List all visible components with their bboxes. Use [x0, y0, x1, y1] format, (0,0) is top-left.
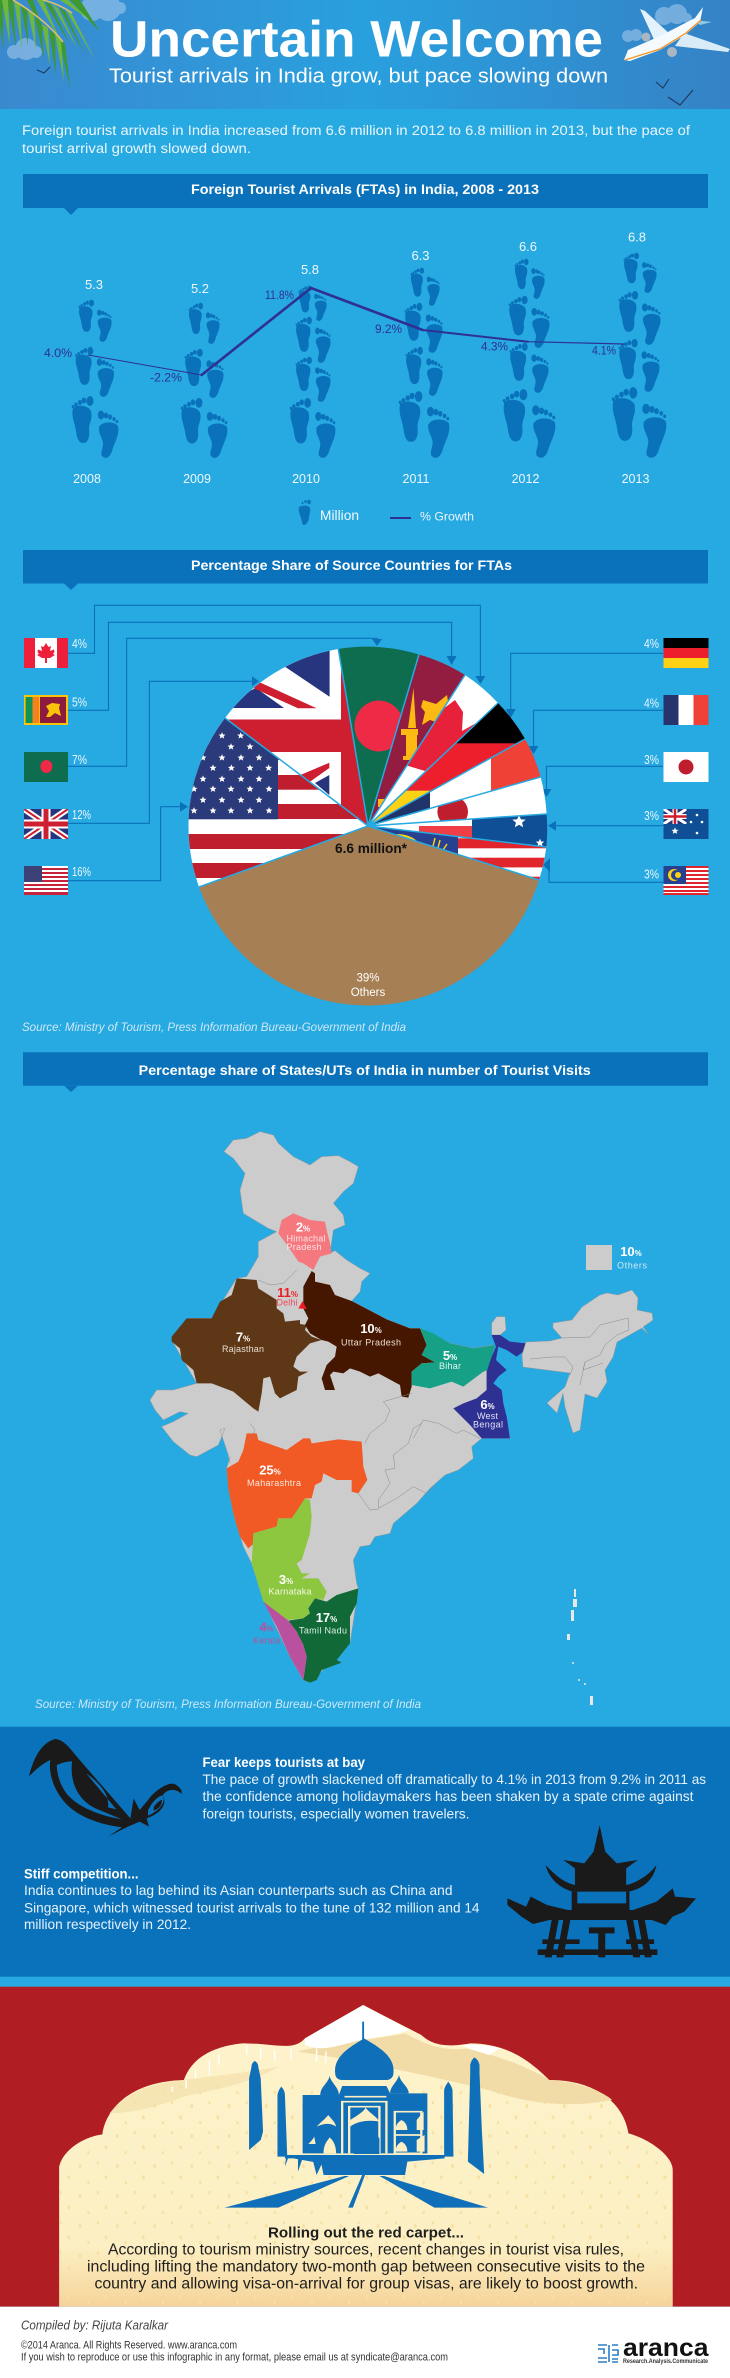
map label: Tamil Nadu: 17%: [316, 1610, 337, 1625]
right percent labels: [644, 637, 659, 882]
aranca logo: aranca: [623, 2334, 710, 2362]
flag: Australia: [664, 809, 708, 839]
map legend: others: [586, 1244, 648, 1270]
map label: Kerala: Kerala: [253, 1636, 280, 1646]
others label: 39%: [356, 972, 380, 984]
aranca logo: Research.Analysis.Communicate: [623, 2358, 708, 2365]
platform: [285, 2155, 445, 2175]
year labels: [73, 472, 649, 486]
flag: Bangladesh: [24, 752, 68, 782]
slice: Sri Lanka: [370, 654, 465, 821]
map label: Kerala: [253, 1620, 280, 1646]
year labels: 2012: [512, 472, 539, 486]
finial: [362, 2022, 364, 2040]
section heading: source countries: Percentage Share of Source Countries for FTAs: [191, 558, 512, 573]
map label: Karnataka: 3%: [279, 1572, 293, 1587]
legend: Million: [320, 508, 359, 523]
pie centre label: 6.6 million*: [335, 841, 408, 856]
slice: Canada: [372, 675, 498, 822]
map legend: others: 10%: [620, 1244, 642, 1259]
text: stiff competition: Stiff competition...: [24, 1866, 138, 1882]
subtitle: Tourist arrivals in India grow, but pace slowing down: [109, 66, 608, 88]
state: Maharashtra: [227, 1433, 367, 1548]
growth labels: 4.3%: [481, 340, 508, 354]
footer: [0, 2307, 730, 2378]
legend: [299, 500, 474, 525]
arch shape: [59, 2005, 673, 2307]
copyright: If you wish to reproduce or use this infographic in any format, please email us at syndicate@aranca.com: [21, 2352, 448, 2364]
slice: Germany: [372, 703, 525, 822]
footprints 2011: [399, 268, 449, 458]
million values: [85, 230, 646, 296]
intro text: Foreign tourist arrivals in India increased from 6.6 million in 2012 to 6.8 million in 2013, but the pace of: [22, 123, 690, 138]
slice: Malaysia: [376, 828, 546, 880]
icon: pagoda: [507, 1825, 696, 1957]
growth labels: 9.2%: [375, 322, 402, 336]
million values: 6.6: [519, 239, 537, 254]
state: Uttar Pradesh: [303, 1271, 435, 1398]
intro text: [22, 123, 690, 156]
garden paths: [224, 2175, 488, 2208]
text: rolling out the red carpet: Rolling out the red carpet...: [268, 2224, 464, 2242]
others label: Others: [351, 987, 386, 999]
growth labels: -2.2%: [150, 370, 182, 384]
year labels: 2013: [622, 472, 649, 486]
clouds: [7, 0, 692, 60]
right percent labels: 4%: [644, 696, 659, 710]
text: rolling out the red carpet: [87, 2224, 645, 2292]
map label: Karnataka: [268, 1572, 312, 1596]
dotted texture: [59, 2080, 673, 2307]
footprints 2008: [72, 300, 118, 458]
panel: fear and competition: [0, 1727, 730, 1977]
copyright: ©2014 Aranca. All Rights Reserved. www.aranca.com: [21, 2340, 237, 2352]
text: stiff competition: India continues to lag behind its Asian counterparts such as China and: [24, 1882, 452, 1898]
section heading: foreign tourist arrivals: [23, 174, 708, 215]
text: fear keeps tourists at bay: the confidence among holidaymakers has been shaken by a spate crime against: [202, 1788, 694, 1804]
map label: West Bengal: 6%: [480, 1397, 495, 1412]
mainland base: [150, 1132, 510, 1683]
map label: Tamil Nadu: Tamil Nadu: [299, 1626, 347, 1636]
left percent labels: 5%: [72, 696, 87, 710]
map label: Rajasthan: Rajasthan: [222, 1344, 264, 1354]
copyright: [21, 2340, 448, 2364]
Sikkim: [492, 1317, 506, 1335]
title: Uncertain Welcome: [110, 10, 603, 68]
slice: others: [199, 826, 539, 1005]
map label: Uttar Pradesh: [341, 1321, 401, 1348]
text: fear keeps tourists at bay: The pace of growth slackened off dramatically to 4.1% in 2013 from 9.2% in 2011 as: [202, 1771, 706, 1787]
map label: Himachal Pradesh: Himachal: [286, 1234, 326, 1244]
small domes: [320, 2075, 409, 2095]
panel: red carpet: [0, 1987, 730, 2307]
text: fear keeps tourists at bay: Fear keeps tourists at bay: [202, 1754, 365, 1770]
text: rolling out the red carpet: According to tourism ministry sources, recent changes in tourist visa rules,: [108, 2242, 624, 2258]
map label: Bihar: [439, 1348, 461, 1371]
minarets: [249, 2061, 263, 2150]
map of India: [150, 1132, 653, 1705]
right percent labels: 3%: [644, 809, 659, 823]
flag: France: [664, 695, 708, 725]
flag: Germany: [664, 638, 708, 668]
left percent labels: 4%: [72, 637, 87, 651]
right percent labels: 3%: [644, 868, 659, 882]
source note: pie: Source: Ministry of Tourism, Press Information Bureau-Government of India: [22, 1020, 406, 1034]
birds: [37, 67, 693, 105]
map label: West Bengal: West: [477, 1411, 498, 1421]
Taj arches: [342, 2097, 421, 2153]
map label: Bihar: Bihar: [439, 1361, 461, 1371]
airplane: [624, 7, 730, 61]
north-east states: [522, 1290, 653, 1433]
slice: USA: [188, 718, 366, 887]
map label: Uttar Pradesh: 10%: [360, 1321, 382, 1336]
slice: France: [374, 739, 541, 824]
map label: Bihar: 5%: [443, 1348, 457, 1363]
text: stiff competition: million respectively in 2012.: [24, 1916, 191, 1932]
main building: [303, 2086, 427, 2153]
map label: Rajasthan: [222, 1330, 264, 1354]
text: fear keeps tourists at bay: foreign tourists, especially women travelers.: [202, 1806, 470, 1822]
year labels: 2009: [183, 472, 211, 486]
growth labels: 4.0%: [44, 346, 72, 360]
connectors: [68, 605, 663, 882]
icon: angry eyes: [29, 1739, 182, 1837]
intro text: tourist arrival growth slowed down.: [22, 141, 251, 156]
header banner: [0, 0, 730, 109]
slice: Bangladesh: [338, 646, 419, 822]
map label: West Bengal: [473, 1397, 503, 1430]
left percent labels: 12%: [72, 808, 91, 822]
palm leaves: [0, 0, 100, 88]
dome: [335, 2038, 394, 2080]
text: fear keeps tourists at bay: [202, 1754, 706, 1822]
million values: 6.3: [411, 248, 430, 263]
map label: Maharashtra: [247, 1462, 301, 1488]
map label: Delhi: 11%: [277, 1285, 298, 1300]
state: Tamil Nadu: [288, 1588, 358, 1683]
million values: 5.3: [85, 277, 103, 292]
flag: Canada: [24, 638, 68, 668]
million values: 5.8: [301, 262, 319, 277]
legend line: [390, 517, 411, 519]
map label: Maharashtra: Maharashtra: [247, 1478, 301, 1488]
text: rolling out the red carpet: including lifting the mandatory two-month gap between consecutive visits to the: [87, 2258, 645, 2276]
right percent labels: 3%: [644, 753, 659, 767]
flags right: [644, 637, 708, 895]
chart: footprint pictogram and growth line: [44, 230, 666, 486]
right percent labels: 4%: [644, 637, 659, 651]
map label: Uttar Pradesh: Uttar Pradesh: [341, 1338, 401, 1348]
million values: 5.2: [191, 281, 209, 296]
section heading: states: Percentage share of States/UTs of India in number of Tourist Visits: [139, 1063, 591, 1078]
state: Rajasthan: [172, 1278, 322, 1412]
map label: West Bengal: Bengal: [473, 1420, 503, 1430]
year labels: 2011: [403, 472, 429, 486]
map label: Rajasthan: 7%: [236, 1330, 250, 1344]
footprints 2010: [290, 286, 335, 458]
islands: [567, 1589, 593, 1705]
map label: Tamil Nadu: [299, 1610, 347, 1636]
section heading: states: [23, 1052, 708, 1092]
map label: Delhi: Delhi: [276, 1298, 298, 1308]
legend foot icon: [299, 500, 311, 525]
flag: USA: [24, 866, 68, 895]
map label: Himachal Pradesh: Pradesh: [286, 1242, 322, 1252]
pie chart: source countries: [185, 640, 550, 1005]
state borders: [249, 1270, 480, 1510]
slice: Japan: [376, 777, 547, 825]
source note: map: Source: Ministry of Tourism, Press Information Bureau-Government of India: [35, 1697, 421, 1711]
white peak: [305, 2005, 410, 2048]
state: Kerala: [263, 1602, 307, 1680]
map label: Delhi: [276, 1285, 298, 1308]
aranca logo: [598, 2334, 710, 2365]
growth labels: 11.8%: [265, 288, 294, 302]
others label: [351, 972, 386, 999]
footprints 2009: [181, 303, 227, 458]
Taj Mahal: [224, 2022, 488, 2208]
section heading: foreign tourist arrivals: Foreign Tourist Arrivals (FTAs) in India, 2008 - 2013: [191, 182, 540, 197]
compiled by: Compiled by: Rijuta Karalkar: [21, 2318, 169, 2332]
map shapes: [150, 1132, 526, 1683]
map label: Himachal Pradesh: [286, 1220, 326, 1252]
flag: Malaysia: [664, 866, 708, 895]
state: Himachal Pradesh: [278, 1213, 332, 1270]
left percent labels: 16%: [72, 865, 91, 879]
text: stiff competition: Singapore, which witnessed tourist arrivals to the tune of 132 million and 14: [24, 1900, 480, 1916]
growth labels: 4.1%: [592, 344, 616, 358]
map label: Kerala: 4%: [259, 1620, 274, 1634]
flag: UK: [24, 809, 68, 839]
state: West Bengal: [453, 1335, 526, 1438]
year labels: 2008: [73, 472, 101, 486]
slice separators: [199, 649, 547, 887]
cream arch with Taj Mahal: [59, 2005, 673, 2307]
million values: 6.8: [628, 230, 646, 244]
map label: Maharashtra: 25%: [259, 1462, 281, 1478]
text: stiff competition: [24, 1866, 480, 1932]
footprints 2013: [612, 253, 666, 458]
state: Karnataka: [252, 1498, 327, 1620]
year labels: 2010: [292, 472, 320, 486]
state: Delhi: [298, 1301, 307, 1309]
text: rolling out the red carpet: country and allowing visa-on-arrival for group visas, are likely to boost growth.: [94, 2276, 638, 2292]
section heading: source countries: [23, 550, 708, 590]
slice: UK: [225, 649, 367, 824]
growth labels: [44, 288, 616, 384]
left percent labels: [72, 637, 91, 879]
map legend: others: Others: [617, 1260, 648, 1270]
flag: Sri Lanka: [24, 695, 68, 725]
flags left: [24, 637, 91, 895]
map label: Himachal Pradesh: 2%: [296, 1220, 310, 1234]
map label: Karnataka: Karnataka: [268, 1586, 312, 1596]
slice: Australia: [376, 814, 548, 847]
tan hills: [298, 2033, 612, 2104]
flag: Japan: [664, 752, 708, 782]
footprints 2012: [503, 259, 555, 458]
growth line: [88, 288, 624, 375]
legend: % Growth: [420, 510, 474, 524]
white flecks: [172, 2045, 326, 2092]
left percent labels: 7%: [72, 753, 87, 767]
state: Bihar: [412, 1328, 495, 1388]
